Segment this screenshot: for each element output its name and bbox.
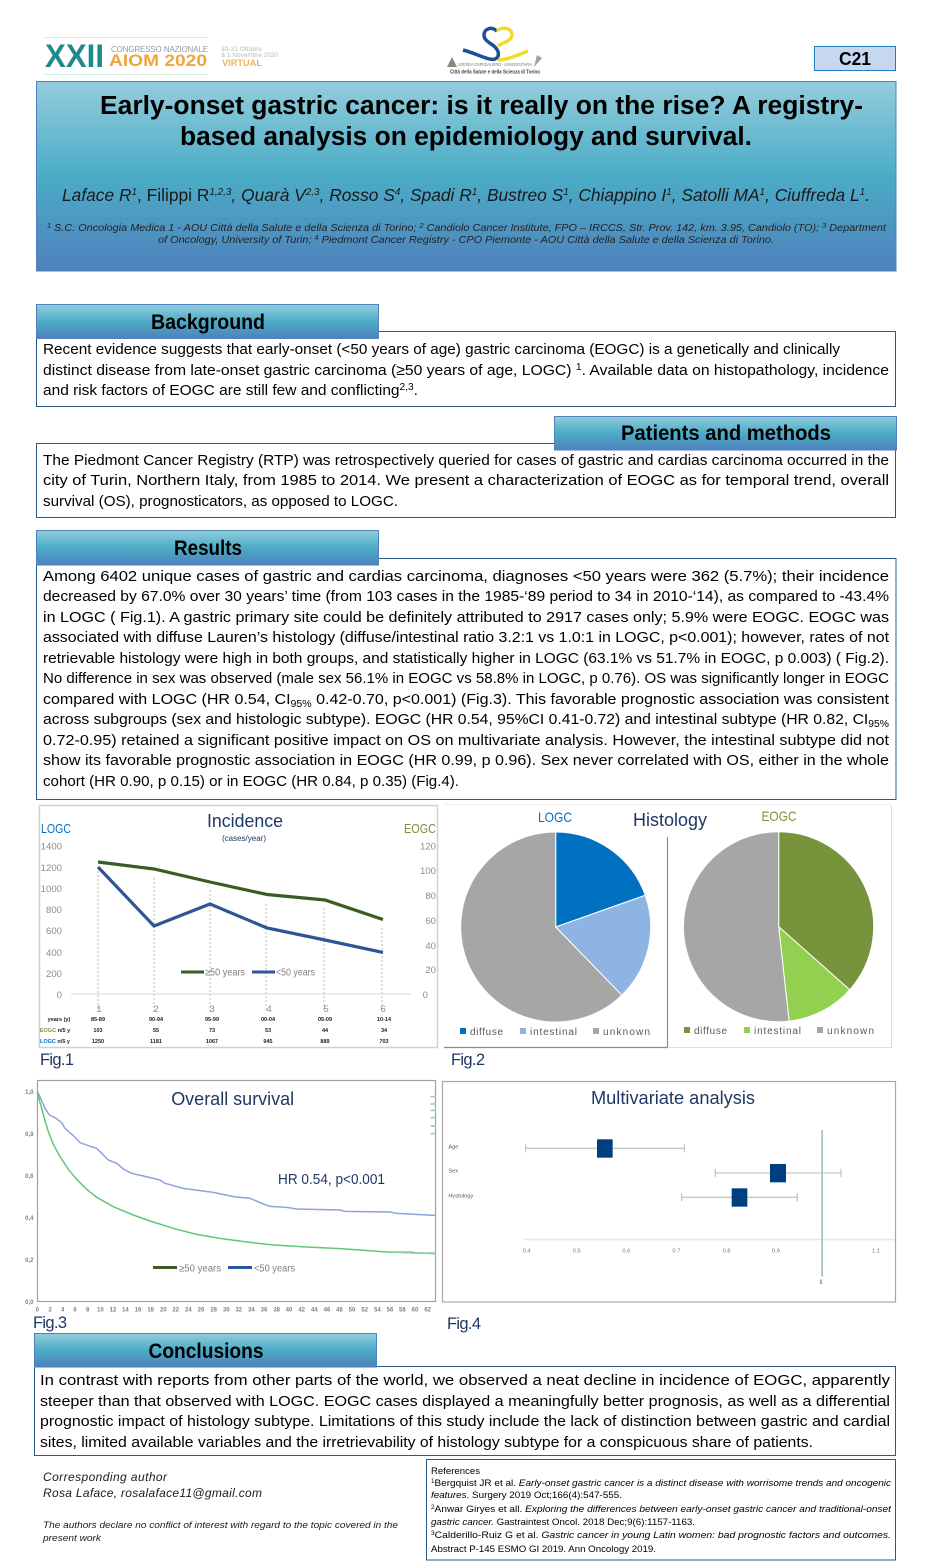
affiliations: of Oncology, University of Turin; bbox=[158, 234, 306, 246]
curve: under 50 years bbox=[37, 1092, 435, 1215]
y axis values: 0,6 bbox=[25, 1174, 34, 1180]
y axis values: 0,8 bbox=[25, 1132, 34, 1138]
x axis values: 50 bbox=[349, 1308, 356, 1314]
axis values: 1 bbox=[819, 1279, 823, 1285]
y axis values bbox=[25, 1090, 34, 1306]
chart: Fig.4 forest plot bbox=[442, 1082, 896, 1302]
panel: conclusions bbox=[34, 1334, 896, 1456]
results text bbox=[43, 568, 890, 790]
category labels: 2 bbox=[153, 1004, 159, 1015]
data table: 95-99 bbox=[205, 1017, 219, 1023]
conclusions text: sites, limited available variables and the irretrievability of histology subtype for a conspicuous share of patients. bbox=[40, 1434, 813, 1451]
conclusions heading bbox=[34, 1334, 376, 1367]
authors: , Spadi R bbox=[400, 185, 472, 205]
authors: Laface R bbox=[62, 185, 132, 205]
authors: 1,2,3 bbox=[209, 187, 232, 198]
legend: LOGC: intestinal bbox=[530, 1027, 577, 1038]
authors: 1 bbox=[131, 187, 137, 198]
chart: Fig.1 incidence line chart bbox=[40, 806, 438, 1048]
legend: EOGC: intestinal bbox=[754, 1026, 801, 1037]
marker: Sex: Sex bbox=[448, 1169, 458, 1175]
results text: show its favorable prognostic association in EOGC (HR 0.99, p 0.96). Sex never correlated with OS, either in the whole bbox=[43, 752, 889, 769]
marker: Histology: Hystology bbox=[448, 1193, 473, 1199]
x axis values: 6 bbox=[73, 1308, 77, 1314]
x axis values: 10 bbox=[97, 1308, 104, 1314]
results text: 95% bbox=[291, 699, 312, 710]
legend: <50 years bbox=[254, 1264, 295, 1274]
data table: EOGC n/5 y bbox=[40, 1028, 71, 1034]
right axis values: 20 bbox=[425, 965, 436, 976]
data table: 55 bbox=[153, 1028, 159, 1034]
line: EOGC bbox=[98, 867, 383, 952]
hazard ratio label: HR 0.54, p<0.001 bbox=[278, 1172, 385, 1188]
left axis values: 1000 bbox=[41, 884, 62, 895]
x axis values: 48 bbox=[336, 1308, 343, 1314]
panel: references: Calderillo-Ruiz G et al. bbox=[435, 1530, 541, 1541]
axis values: 0.6 bbox=[622, 1248, 630, 1254]
title: Early-onset gastric cancer: is it really on the rise? A registry- bbox=[100, 92, 863, 120]
right axis label: EOGC bbox=[404, 822, 436, 836]
logo: Città della Salute: Città della Salute e della Scienza di Torino bbox=[450, 70, 540, 76]
x axis values: 40 bbox=[286, 1308, 293, 1314]
logo: Città della Salute: AZIENDA OSPEDALIERO - UNIVERSITARIA bbox=[458, 62, 533, 67]
x axis values: 34 bbox=[248, 1308, 255, 1314]
data table: 703 bbox=[379, 1039, 389, 1045]
corresponding author note: present work bbox=[42, 1533, 102, 1544]
left axis values bbox=[41, 842, 62, 1001]
panel: background bbox=[36, 304, 896, 406]
right axis values bbox=[420, 842, 436, 1001]
results text: across subgroups (sex and histologic subtype). EOGC (HR 0.54, 95%CI 0.41-0.72) and intestinal subtype (HR 0.82, CI bbox=[43, 711, 841, 728]
conclusions text bbox=[40, 1372, 890, 1451]
conclusions text: steeper than that observed with LOGC. EOGC cases displayed a meaningfully better prognosis, as well as a differential bbox=[40, 1393, 890, 1410]
category labels: 4 bbox=[266, 1004, 272, 1015]
affiliations: 3 bbox=[822, 223, 826, 230]
results heading: Results bbox=[174, 537, 242, 560]
marker: Histology bbox=[448, 1188, 747, 1207]
x axis values: 18 bbox=[147, 1308, 155, 1314]
results text: in LOGC ( Fig.1). A gastric primary site could be definitely attributed to 2917 cases only; 5.9% were EOGC. EOGC was bbox=[43, 609, 889, 626]
authors: , Filippi R bbox=[137, 185, 209, 205]
censor marks bbox=[393, 1097, 436, 1253]
panel: references: 2 bbox=[431, 1505, 435, 1511]
right axis values: 60 bbox=[425, 916, 436, 927]
legend bbox=[153, 1264, 295, 1274]
poster code C21 bbox=[814, 46, 896, 70]
category labels: 3 bbox=[209, 1004, 215, 1015]
legend: LOGC bbox=[460, 1027, 650, 1038]
panel: results bbox=[36, 530, 896, 800]
right axis values: 100 bbox=[420, 866, 436, 877]
conclusions heading: Conclusions bbox=[148, 1340, 264, 1363]
x axis values: 60 bbox=[412, 1308, 419, 1314]
x axis values: 62 bbox=[424, 1308, 432, 1314]
logo: AIOM 2020 congress: CONGRESSO NAZIONALE bbox=[111, 44, 208, 54]
x axis values: 22 bbox=[172, 1308, 180, 1314]
marker: Age bbox=[448, 1139, 613, 1158]
data table: 889 bbox=[320, 1039, 330, 1045]
data table: 53 bbox=[265, 1028, 271, 1034]
marker: Age: Age bbox=[448, 1145, 458, 1151]
pie: LOGC: LOGC bbox=[538, 809, 572, 825]
results text: 0.72-0.95) retained a significant positive impact on OS on multivariate analysis. However, the intestinal subtype did not bbox=[43, 732, 890, 749]
data table: 05-09 bbox=[318, 1017, 332, 1023]
background text: 1 bbox=[576, 362, 582, 373]
legend: LOGC: diffuse bbox=[470, 1027, 503, 1038]
x axis values: 20 bbox=[160, 1308, 167, 1314]
results text: associated with diffuse Lauren’s histology (diffuse/intestinal ratio 3.2:1 vs 1.0:1 in LOGC, p<0.001); however, rates of not bbox=[43, 629, 890, 646]
panel: references: Gastric cancer in young Latin women: bad prognostic factors and outcomes. bbox=[541, 1530, 891, 1541]
x axis values bbox=[36, 1308, 432, 1314]
data table: years (y) bbox=[48, 1017, 70, 1023]
methods text: city of Turin, Northern Italy, from 1985 to 2014. We present a characterization of EOGC as for temporal trend, overall bbox=[43, 472, 889, 489]
data table: 44 bbox=[322, 1028, 329, 1034]
results text: No difference in sex was observed (male sex 56.1% in EOGC vs 58.8% in LOGC, p 0.76). OS was significantly longer in EOGC bbox=[43, 670, 889, 687]
authors: 4 bbox=[395, 187, 401, 198]
legend: LOGC: unknown bbox=[603, 1027, 650, 1038]
axis values: 0.7 bbox=[672, 1248, 680, 1254]
data table: 73 bbox=[209, 1028, 215, 1034]
axis values: 1.1 bbox=[872, 1248, 880, 1254]
right axis values: 80 bbox=[425, 891, 436, 902]
y axis values: 0,2 bbox=[25, 1258, 34, 1264]
methods text: The Piedmont Cancer Registry (RTP) was retrospectively queried for cases of gastric and cardias carcinoma occurred in the bbox=[43, 452, 889, 469]
authors: , Chiappino I bbox=[569, 185, 666, 205]
x axis values: 56 bbox=[387, 1308, 394, 1314]
legend: ≥50 years bbox=[179, 1264, 221, 1274]
poster code C21: C21 bbox=[839, 49, 871, 69]
conclusions text: prognostic impact of histology subtype. Limitations of this study include the lack of distinction between gastric and cardial bbox=[40, 1413, 890, 1430]
background text: and risk factors of EOGC are still few and conflicting bbox=[43, 382, 393, 399]
logo: AIOM 2020 congress: VIRTUAL bbox=[222, 58, 263, 68]
methods text bbox=[43, 452, 889, 510]
data table: 34 bbox=[381, 1028, 388, 1034]
x axis values: 28 bbox=[210, 1308, 218, 1314]
data table: 1181 bbox=[150, 1039, 162, 1045]
pie heading: Histology: Histology bbox=[633, 809, 708, 830]
logo: AIOM 2020 congress: AIOM 2020 bbox=[109, 52, 207, 70]
x axis values: 32 bbox=[235, 1308, 243, 1314]
marker: Sex bbox=[448, 1164, 786, 1182]
background text: . bbox=[414, 382, 418, 399]
panel: references: References bbox=[431, 1466, 480, 1477]
left axis label: LOGC bbox=[41, 822, 71, 836]
results text: cohort (HR 0.90, p 0.15) or in EOGC (HR 0.84, p 0.35) (Fig.4). bbox=[43, 773, 459, 790]
data table: 1250 bbox=[92, 1039, 104, 1045]
data table: LOGC n/5 y bbox=[40, 1039, 71, 1045]
data table: 90-94 bbox=[149, 1017, 164, 1023]
background text: Recent evidence suggests that early-onset (<50 years of age) gastric carcinoma (EOGC) is a genetically and clinically bbox=[43, 341, 840, 358]
title: based analysis on epidemiology and survival. bbox=[180, 123, 752, 151]
left axis values: 0 bbox=[57, 990, 62, 1001]
x axis values: 54 bbox=[374, 1308, 381, 1314]
authors: 1 bbox=[760, 187, 765, 198]
category labels bbox=[96, 1004, 386, 1015]
panel: references: features. Surgery 2019 Oct;166(4):547-555. bbox=[431, 1490, 622, 1501]
authors: 1 bbox=[472, 187, 477, 198]
category labels: 1 bbox=[96, 1004, 102, 1015]
caption Fig.1: Fig.1 bbox=[40, 1051, 74, 1069]
data table: 85-89 bbox=[91, 1017, 105, 1023]
panel: references: 3 bbox=[431, 1531, 435, 1537]
x axis values: 8 bbox=[86, 1308, 90, 1314]
y axis values: 0,0 bbox=[25, 1300, 34, 1306]
category labels: 5 bbox=[323, 1004, 329, 1015]
corresponding author note: Rosa Laface, rosalaface11@gmail.com bbox=[43, 1486, 262, 1500]
authors: , Bustreo S bbox=[477, 185, 564, 205]
axis values: 0.8 bbox=[723, 1248, 731, 1254]
affiliations bbox=[47, 222, 887, 246]
x axis values: 38 bbox=[273, 1308, 281, 1314]
y axis values: 1,0 bbox=[25, 1090, 34, 1096]
chart title: Overall survival bbox=[171, 1088, 294, 1109]
affiliations: 4 bbox=[315, 235, 319, 242]
pie: EOGC bbox=[683, 808, 874, 1022]
results text: compared with LOGC (HR 0.54, CI bbox=[43, 691, 278, 708]
x axis values: 30 bbox=[223, 1308, 230, 1314]
authors: , Satolli MA bbox=[672, 185, 760, 205]
x axis values: 44 bbox=[311, 1308, 318, 1314]
axis values: 0.5 bbox=[573, 1248, 581, 1254]
chart: Fig.3 overall survival bbox=[25, 1080, 436, 1314]
legend: EOGC bbox=[684, 1026, 874, 1037]
left axis values: 600 bbox=[46, 926, 62, 937]
corresponding author note: Corresponding author bbox=[43, 1470, 168, 1484]
chart title: Multivariate analysis bbox=[591, 1087, 755, 1108]
logo: AIOM 2020 congress: 30-31 Ottobre bbox=[221, 46, 262, 53]
background text: . Available data on histopathology, incidence bbox=[582, 362, 889, 379]
caption Fig.4: Fig.4 bbox=[447, 1315, 481, 1333]
x axis values: 26 bbox=[198, 1308, 205, 1314]
authors: 1 bbox=[860, 187, 865, 198]
left axis values: 200 bbox=[46, 969, 62, 980]
category labels: 6 bbox=[380, 1004, 386, 1015]
authors: , Quarà V bbox=[231, 185, 308, 205]
authors: 1 bbox=[666, 187, 672, 198]
legend bbox=[181, 968, 315, 978]
background heading bbox=[36, 304, 378, 338]
x axis values: 4 bbox=[61, 1308, 65, 1314]
legend: EOGC: unknown bbox=[827, 1026, 874, 1037]
y axis values: 0,4 bbox=[25, 1216, 34, 1222]
right axis values: 120 bbox=[420, 842, 436, 852]
pie: EOGC: EOGC bbox=[762, 808, 796, 824]
legend: ≥50 years bbox=[205, 968, 245, 978]
title bbox=[100, 92, 863, 151]
panel: references: Exploring the differences between early-onset gastric cancer and traditional-onset bbox=[525, 1504, 891, 1515]
x axis values: 2 bbox=[48, 1308, 52, 1314]
panel: references: Anwar Giryes et all. bbox=[435, 1504, 525, 1515]
x axis values: 16 bbox=[135, 1308, 142, 1314]
conclusions text: In contrast with reports from other parts of the world, we observed a neat decline in incidence of EOGC, apparently bbox=[40, 1372, 890, 1389]
panel: references: Bergquist JR et al. bbox=[435, 1478, 519, 1489]
pie: LOGC bbox=[461, 809, 651, 1022]
right axis values: 0 bbox=[423, 990, 428, 1001]
chart subtitle: (cases/year) bbox=[222, 834, 266, 843]
background text: 2,3 bbox=[400, 382, 414, 393]
panel: references bbox=[426, 1460, 896, 1560]
x axis values: 14 bbox=[122, 1308, 129, 1314]
data table: 945 bbox=[263, 1039, 273, 1045]
background text: distinct disease from late-onset gastric carcinoma (≥50 years of age, LOGC) bbox=[43, 362, 554, 379]
panel: references: Abstract P-145 ESMO GI 2019. Ann Oncology 2019. bbox=[431, 1544, 656, 1555]
authors: . bbox=[865, 185, 870, 205]
authors: , Rosso S bbox=[320, 185, 395, 205]
affiliations: S.C. Oncologia Medica 1 - AOU Città della Salute e della Scienza di Torino; bbox=[51, 222, 419, 234]
results text: retrievable histology were high in both groups, and statistically higher in LOGC (63.1% vs 51.7% in EOGC, p 0.003) ( Fig.2). bbox=[43, 650, 889, 667]
axis values: 0.4 bbox=[523, 1248, 531, 1254]
logo: AIOM 2020 congress: & 1 Novembre 2020 bbox=[221, 52, 278, 59]
methods heading bbox=[554, 416, 896, 450]
left axis values: 1400 bbox=[41, 842, 62, 852]
left axis values: 800 bbox=[46, 905, 62, 916]
authors: 2,3 bbox=[305, 187, 320, 198]
affiliations: Department bbox=[826, 222, 887, 234]
results text: 95% bbox=[868, 719, 889, 730]
legend: <50 years bbox=[276, 968, 315, 978]
x axis values: 46 bbox=[324, 1308, 331, 1314]
corresponding author note bbox=[42, 1470, 398, 1544]
background text bbox=[43, 341, 889, 399]
results heading bbox=[36, 530, 378, 565]
authors: , Ciuffreda L bbox=[765, 185, 860, 205]
panel: patients and methods bbox=[36, 416, 896, 518]
authors: 1 bbox=[563, 187, 569, 198]
affiliations: 1 bbox=[47, 223, 51, 230]
data table: 1067 bbox=[206, 1039, 218, 1045]
panel: references: Early-onset gastric cancer is a distinct disease with worrisome trends and oncogenic bbox=[519, 1478, 891, 1489]
x axis values: 52 bbox=[361, 1308, 369, 1314]
right axis values: 40 bbox=[425, 941, 436, 952]
left axis values: 1200 bbox=[41, 863, 62, 874]
caption Fig.2: Fig.2 bbox=[451, 1051, 485, 1069]
chart title: Incidence bbox=[207, 810, 283, 831]
axis values: 0.9 bbox=[772, 1248, 780, 1254]
background heading: Background bbox=[151, 311, 265, 334]
logo: Città della Salute bbox=[447, 28, 542, 75]
data table: 103 bbox=[93, 1028, 103, 1034]
chart: Fig.2 histology pies bbox=[444, 804, 892, 1048]
left axis values: 400 bbox=[46, 948, 62, 959]
affiliations: Piedmont Cancer Registry - CPO Piemonte - AOU Città della Salute e della Scienza di Torino. bbox=[319, 234, 774, 246]
x axis values: 12 bbox=[110, 1308, 117, 1314]
axis values bbox=[523, 1248, 880, 1285]
corresponding author note: The authors declare no conflict of interest with regard to the topic covered in the bbox=[43, 1520, 398, 1531]
caption Fig.3: Fig.3 bbox=[33, 1314, 67, 1332]
methods heading: Patients and methods bbox=[621, 422, 831, 445]
logo: AIOM 2020 congress bbox=[45, 37, 278, 75]
data table: 00-04 bbox=[261, 1017, 276, 1023]
x axis values: 0 bbox=[36, 1308, 40, 1314]
results text: decreased by 67.0% over 30 years’ time (from 103 cases in the 1985-‘89 period to 34 in 2010-‘14), as compared to -43.4% bbox=[43, 588, 889, 605]
legend: EOGC: diffuse bbox=[694, 1026, 727, 1037]
panel: title header bbox=[36, 82, 896, 271]
panel: references: 1 bbox=[431, 1479, 435, 1485]
data table bbox=[40, 1017, 392, 1045]
results text: 0.42-0.70, p<0.001) (Fig.3). This favorable prognostic association was consistent bbox=[312, 691, 890, 708]
curve: 50 years or over bbox=[37, 1092, 435, 1254]
x axis values: 24 bbox=[185, 1308, 192, 1314]
x axis values: 36 bbox=[261, 1308, 268, 1314]
results text: Among 6402 unique cases of gastric and cardias carcinoma, diagnoses <50 years were 362 (5.7%); their incidence bbox=[43, 568, 889, 585]
logo: AIOM 2020 congress: XXII bbox=[45, 38, 104, 74]
data table: 10-14 bbox=[377, 1017, 392, 1023]
affiliations: 2 bbox=[418, 223, 424, 230]
x axis values: 58 bbox=[399, 1308, 406, 1314]
methods text: survival (OS), prognosticators, as opposed to LOGC. bbox=[43, 493, 398, 510]
panel: references: gastric cancer. Gastraintest Oncol. 2018 Dec;9(6):1157-1163. bbox=[431, 1517, 695, 1528]
line: LOGC bbox=[98, 862, 383, 920]
affiliations: Candiolo Cancer Institute, FPO – IRCCS, Str. Prov. 142, km. 3.95, Candiolo (TO); bbox=[424, 222, 822, 234]
x axis values: 42 bbox=[298, 1308, 306, 1314]
